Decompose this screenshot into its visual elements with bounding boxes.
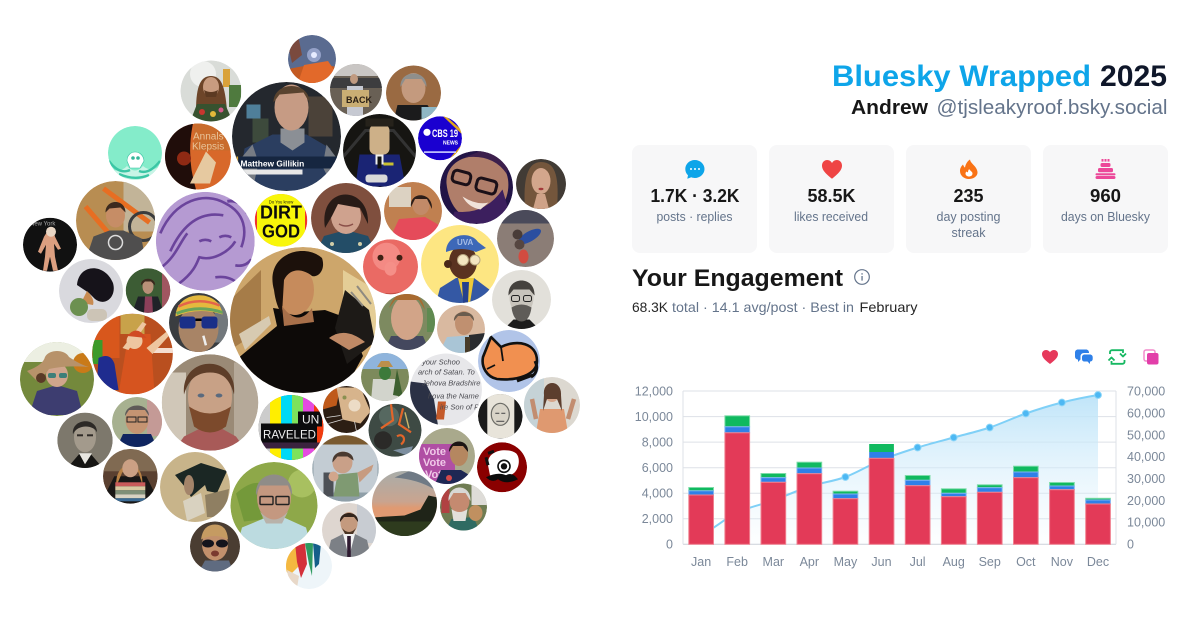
month labels: Mar bbox=[763, 555, 784, 569]
avatar: older man in suit bbox=[437, 305, 485, 353]
left axis labels: 0 bbox=[666, 538, 673, 552]
avatar: handwritten note: hova the Name bbox=[428, 392, 479, 400]
left axis labels: 4,000 bbox=[642, 486, 673, 500]
avatar: man with Vote sign bbox=[419, 428, 475, 484]
avatar: teal skull bbox=[108, 126, 162, 180]
left axis labels: 2,000 bbox=[642, 512, 673, 526]
cumulative line bbox=[701, 395, 1098, 535]
icon: quotes bbox=[1144, 350, 1158, 364]
stat number: 58.5K bbox=[808, 186, 856, 206]
icon: replies bbox=[1075, 350, 1093, 364]
bar: Jun bbox=[869, 444, 894, 544]
right axis labels: 60,000 bbox=[1127, 406, 1165, 420]
avatar: woman holding books bbox=[103, 449, 158, 504]
avatar: laughing man with glasses, purple tones bbox=[440, 150, 513, 224]
avatar: Unraveled test card: UN bbox=[302, 412, 319, 426]
bar: Oct bbox=[1014, 466, 1038, 544]
avatar: cat close-up bbox=[322, 386, 370, 433]
avatar: UVA cap cartoon: UVA bbox=[457, 238, 474, 247]
avatar: woman with dark hair bbox=[311, 183, 381, 253]
avatar: pilot doll bbox=[343, 114, 416, 187]
engagement summary bbox=[632, 299, 918, 315]
chart: monthly engagement bbox=[635, 384, 1165, 569]
avatar: Annals Klepsis book cover bbox=[165, 124, 231, 190]
avatar: man with Vote sign: Vot bbox=[425, 469, 442, 481]
avatar: Annals Klepsis book cover: Klepsis bbox=[192, 142, 224, 152]
stacked bars bbox=[689, 416, 1110, 544]
bar: Apr bbox=[797, 462, 822, 544]
avatar: pink clay face bbox=[363, 239, 418, 295]
icon: flame bbox=[960, 160, 978, 179]
avatar: mustached mascot logo bbox=[477, 442, 527, 492]
icon: chat bubble bbox=[685, 160, 704, 179]
avatar: man with glasses, greyscale bbox=[492, 270, 551, 330]
title: Bluesky Wrapped bbox=[832, 60, 1091, 93]
avatar: Unraveled test card bbox=[258, 394, 324, 460]
avatar: Dirt God: GOD bbox=[262, 220, 300, 241]
avatar: sepia collage bbox=[160, 452, 230, 522]
avatar: Matthew Gillikin interview: Matthew Gillikin bbox=[240, 158, 304, 168]
stat label: day posting bbox=[936, 210, 1001, 224]
avatar: dog in snow bbox=[59, 259, 123, 323]
right axis labels: 30,000 bbox=[1127, 472, 1165, 486]
avatar: woman in sunflowers bbox=[20, 342, 94, 416]
area under cumulative line bbox=[701, 395, 1098, 544]
stat label: days on Bluesky bbox=[1061, 210, 1151, 224]
avatar: old sepia portrait bbox=[57, 413, 113, 468]
stat number: 1.7K · 3.2K bbox=[650, 186, 740, 206]
avatar: handwritten note: Jehova Bradshire bbox=[421, 378, 480, 388]
bar: Mar bbox=[761, 474, 786, 544]
avatar: man in green garden bbox=[126, 268, 171, 314]
avatar: Dirt God bbox=[255, 193, 307, 247]
avatar: handwritten note: ire Son of P bbox=[440, 402, 479, 412]
bar: Dec bbox=[1086, 498, 1110, 544]
avatar: doll on black bbox=[23, 218, 77, 272]
month labels bbox=[691, 555, 1109, 569]
avatar: bearded man, red shirt bbox=[162, 354, 259, 451]
bar: Jul bbox=[905, 476, 930, 544]
avatar: child in green shirt bbox=[312, 434, 380, 502]
bar: May bbox=[833, 491, 858, 544]
avatar: sketched portrait bbox=[478, 393, 523, 439]
stat label second line: streak bbox=[952, 226, 986, 240]
avatar: man with orange bike bbox=[76, 181, 158, 260]
month labels: Nov bbox=[1051, 555, 1074, 569]
avatar: orange cat doodle bbox=[478, 330, 540, 392]
avatar: woman in sunglasses bbox=[190, 522, 240, 572]
left axis labels: 10,000 bbox=[635, 410, 673, 424]
avatar: colour smear bbox=[286, 543, 332, 589]
avatar: sunset landscape bbox=[372, 470, 438, 536]
avatar: grey-haired man in wood room bbox=[386, 66, 442, 121]
icon: likes bbox=[1042, 350, 1058, 364]
stat number: 960 bbox=[1090, 186, 1121, 206]
panel: days on Bluesky bbox=[1043, 145, 1168, 253]
avatar: man in field with green mask bbox=[361, 353, 409, 401]
user name and handle: Andrew bbox=[851, 97, 928, 119]
month labels: Aug bbox=[943, 555, 965, 569]
avatar: UVA cap cartoon bbox=[421, 225, 499, 303]
avatar: handwritten note bbox=[410, 354, 482, 426]
avatar: handwritten note: your Schoo bbox=[421, 358, 460, 366]
avatar: ginger man bbox=[379, 292, 435, 350]
stat label: likes received bbox=[794, 210, 868, 224]
avatar: bearded man with dog bbox=[440, 484, 488, 531]
right axis labels: 70,000 bbox=[1127, 384, 1165, 398]
right axis labels: 0 bbox=[1127, 538, 1134, 552]
cumulative line points bbox=[842, 392, 1101, 480]
avatar: Dirt God: DIRT bbox=[260, 201, 303, 222]
avatar: man at capitol bbox=[180, 60, 242, 122]
bar: Jan bbox=[689, 488, 714, 544]
avatar: Dirt God: Do You know bbox=[269, 199, 294, 204]
avatar: smiling man with glasses bbox=[112, 397, 163, 447]
avatar: woman gesturing bbox=[524, 377, 580, 433]
avatar: man in suit bbox=[322, 503, 377, 558]
heading: your engagement: Your Engagement bbox=[632, 265, 843, 292]
bar: Feb bbox=[725, 416, 750, 544]
panel: posts and replies bbox=[632, 145, 757, 253]
bar: Nov bbox=[1050, 482, 1074, 544]
month labels: Oct bbox=[1016, 555, 1036, 569]
month labels: May bbox=[834, 555, 858, 569]
stat number: 235 bbox=[954, 186, 984, 206]
avatar: man with Vote sign: Vote bbox=[423, 446, 446, 458]
panel: likes received bbox=[769, 145, 894, 253]
engagement summary: 68.3K bbox=[632, 299, 669, 315]
left axis labels: 12,000 bbox=[635, 384, 673, 398]
user name and handle: @tjsleakyroof.bsky.social bbox=[936, 97, 1168, 119]
month labels: Jul bbox=[910, 555, 926, 569]
month labels: Sep bbox=[979, 555, 1001, 569]
right axis labels: 20,000 bbox=[1127, 494, 1165, 508]
avatar: bike race bbox=[496, 210, 554, 267]
avatar: woman with long hair bbox=[516, 159, 566, 209]
avatar: Matthew Gillikin interview bbox=[232, 82, 342, 191]
stat label: posts · replies bbox=[656, 210, 732, 224]
avatar: CBS 19 News: NEWS bbox=[443, 140, 459, 146]
month labels: Feb bbox=[726, 555, 748, 569]
avatar: red-haired cartoon bbox=[92, 313, 174, 394]
avatar: doll on black: New York bbox=[30, 222, 56, 228]
avatar: purple line drawing bbox=[156, 192, 255, 291]
left axis labels bbox=[635, 384, 673, 552]
right axis labels bbox=[1127, 384, 1165, 552]
avatar: CBS 19 News bbox=[418, 116, 462, 160]
avatar: lightning sky bbox=[288, 35, 336, 83]
month labels: Jan bbox=[691, 555, 711, 569]
avatar: woman in red sweater bbox=[384, 182, 442, 240]
engagement summary: February bbox=[860, 299, 918, 315]
right axis labels: 40,000 bbox=[1127, 450, 1165, 464]
left axis labels: 6,000 bbox=[642, 461, 673, 475]
month labels: Jun bbox=[871, 555, 892, 569]
month labels: Apr bbox=[800, 555, 819, 569]
engagement summary: total · 14.1 avg/post · Best in bbox=[672, 299, 854, 315]
icon: reposts bbox=[1108, 350, 1126, 364]
avatar: Annals Klepsis book cover: Annals bbox=[193, 132, 224, 142]
avatar: man with Vote sign: Vote bbox=[423, 457, 446, 469]
avatar: CBS 19 News: CBS 19 bbox=[432, 128, 458, 140]
avatar: rainbow hat and sunglasses bbox=[169, 293, 228, 352]
panel: day posting streak bbox=[906, 145, 1031, 253]
bar: Aug bbox=[941, 489, 966, 544]
avatar: handwritten note: arch of Satan. To bbox=[418, 368, 475, 376]
legend icons bbox=[1042, 350, 1158, 364]
avatar: protest sign BACK: BACK bbox=[346, 95, 372, 105]
right axis labels: 50,000 bbox=[1127, 428, 1165, 442]
left axis labels: 8,000 bbox=[642, 436, 673, 450]
icon: cake bbox=[1096, 159, 1116, 179]
panel: avatar bubble cluster bbox=[20, 35, 580, 589]
grid lines bbox=[683, 391, 1116, 544]
avatar: protest sign BACK bbox=[330, 64, 382, 116]
bar: Sep bbox=[977, 485, 1002, 544]
avatar: man in black, large photo bbox=[230, 247, 376, 393]
avatar: grey-haired man outdoors bbox=[230, 462, 318, 550]
month labels: Dec bbox=[1087, 555, 1109, 569]
icon: info bbox=[855, 270, 869, 284]
right axis labels: 10,000 bbox=[1127, 516, 1165, 530]
icon: heart bbox=[822, 160, 842, 179]
title: 2025 bbox=[1100, 60, 1167, 93]
avatar: Unraveled test card: RAVELED bbox=[263, 430, 316, 442]
avatar: topographic map art bbox=[368, 404, 422, 457]
